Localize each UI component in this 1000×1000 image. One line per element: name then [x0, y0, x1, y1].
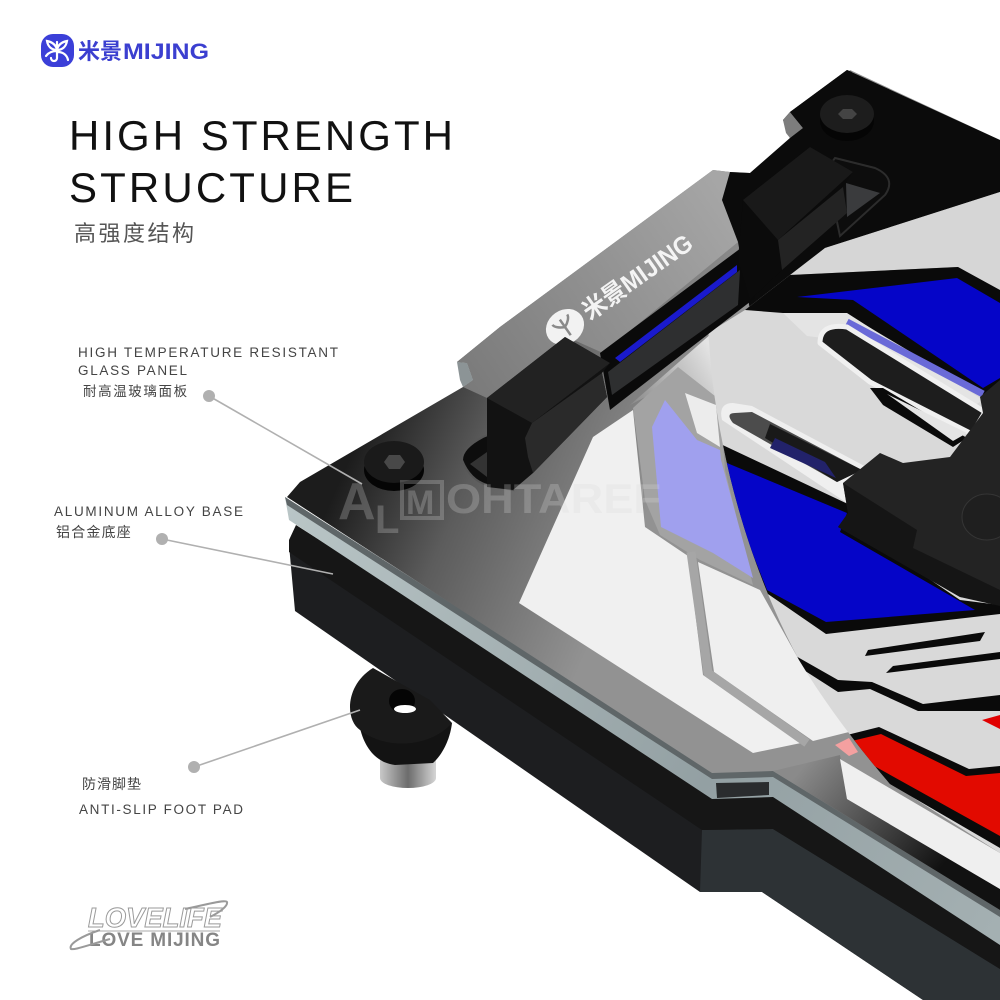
watermark: L: [375, 498, 399, 542]
clamp screw: [962, 494, 1000, 540]
leader line: [188, 710, 360, 773]
right white panel: [698, 562, 849, 741]
label text: 铝合金底座: [56, 524, 132, 540]
small red shape: [982, 715, 1000, 729]
label text: GLASS PANEL: [78, 363, 187, 378]
upper white panel: [685, 393, 720, 447]
brand wordmark: MIJING: [123, 39, 209, 64]
love life logo: LOVELIFE: [88, 902, 223, 933]
upper slot: [820, 322, 985, 447]
chinese subtitle: 高强度结构: [74, 221, 197, 246]
red shape: [854, 734, 1000, 836]
lower stripe: [691, 552, 807, 743]
right clamp block: [838, 380, 1000, 606]
left of arc graphics: [519, 333, 849, 753]
icon: mijing logo badge: [41, 34, 74, 67]
lower black outline: [712, 440, 1000, 634]
label text: 防滑脚垫: [82, 776, 142, 792]
lower blue shape: [715, 458, 975, 622]
ghost red tip: [835, 738, 858, 756]
aluminum base side: [289, 545, 1000, 1000]
edge notch: [716, 782, 769, 798]
red outline: [835, 727, 1000, 848]
callout: foot pad: [79, 710, 360, 817]
right of arc artwork: [700, 192, 1000, 853]
long slot strip: [600, 245, 755, 410]
callout: aluminum base: [54, 504, 333, 574]
upper black outline: [745, 267, 1000, 395]
watermark: OHTAREF: [446, 475, 661, 522]
grey top strip: [457, 170, 738, 398]
label text: HIGH TEMPERATURE RESISTANT: [78, 345, 338, 360]
lower left slot recess: [462, 430, 513, 490]
base facet: [700, 829, 1000, 1000]
lower slot: [721, 403, 872, 503]
brand logo: [41, 34, 209, 67]
title: STRUCTURE: [69, 164, 353, 211]
grey stripe: [633, 367, 753, 585]
lower screw: [364, 441, 424, 491]
anti-slip foot pad: [350, 668, 452, 788]
black stripe 1: [865, 632, 985, 656]
label text: [54, 504, 243, 540]
strip brand mark: [539, 226, 699, 352]
translucent blue: [652, 400, 753, 578]
lower black curve: [797, 656, 1000, 711]
watermark: [338, 473, 661, 542]
brand wordmark: 米景: [78, 39, 122, 64]
love life logo: [71, 901, 227, 951]
far slot recess: [826, 158, 889, 236]
label text: ANTI-SLIP FOOT PAD: [79, 802, 243, 817]
strip brand mark: 米景MIJING: [577, 229, 698, 326]
corner bevel: [783, 112, 803, 138]
lower clamp block: [487, 337, 610, 490]
glass upper bevel: [285, 497, 1000, 917]
title: [69, 112, 453, 211]
base top gasket: [289, 525, 1000, 969]
left white panel: [519, 410, 801, 753]
watermark: A: [338, 473, 376, 531]
black stripe 2: [886, 652, 1000, 673]
light wash: [630, 333, 716, 405]
black top panel: [722, 70, 1000, 310]
product: fixture plate: [285, 70, 1000, 1000]
finger outline: [870, 388, 967, 447]
slot reflection band: [847, 322, 983, 394]
strip bevel: [457, 362, 473, 387]
upper blue shape: [797, 278, 1000, 388]
upper white strip: [783, 313, 983, 405]
lower right dark face: [773, 755, 1000, 910]
slot interior: [820, 326, 985, 434]
top screw: [820, 95, 874, 141]
leader line: [156, 533, 333, 574]
watermark: M: [406, 484, 434, 522]
label text: [78, 345, 338, 399]
glass top face: [287, 70, 1000, 910]
upper light panel: [790, 192, 1000, 275]
leader line: [203, 390, 362, 484]
callout: glass panel: [78, 345, 362, 484]
label text: [79, 776, 243, 817]
label text: 耐高温玻璃面板: [83, 383, 189, 399]
upper clamp block: [738, 147, 853, 300]
glass edge band: [285, 497, 1000, 945]
label text: ALUMINUM ALLOY BASE: [54, 504, 243, 519]
finger highlight: [887, 394, 967, 441]
title: HIGH STRENGTH: [69, 112, 453, 159]
lower white shape: [840, 759, 1000, 889]
light panel: [700, 270, 1000, 853]
love life logo: LOVE MIJING: [89, 930, 220, 951]
